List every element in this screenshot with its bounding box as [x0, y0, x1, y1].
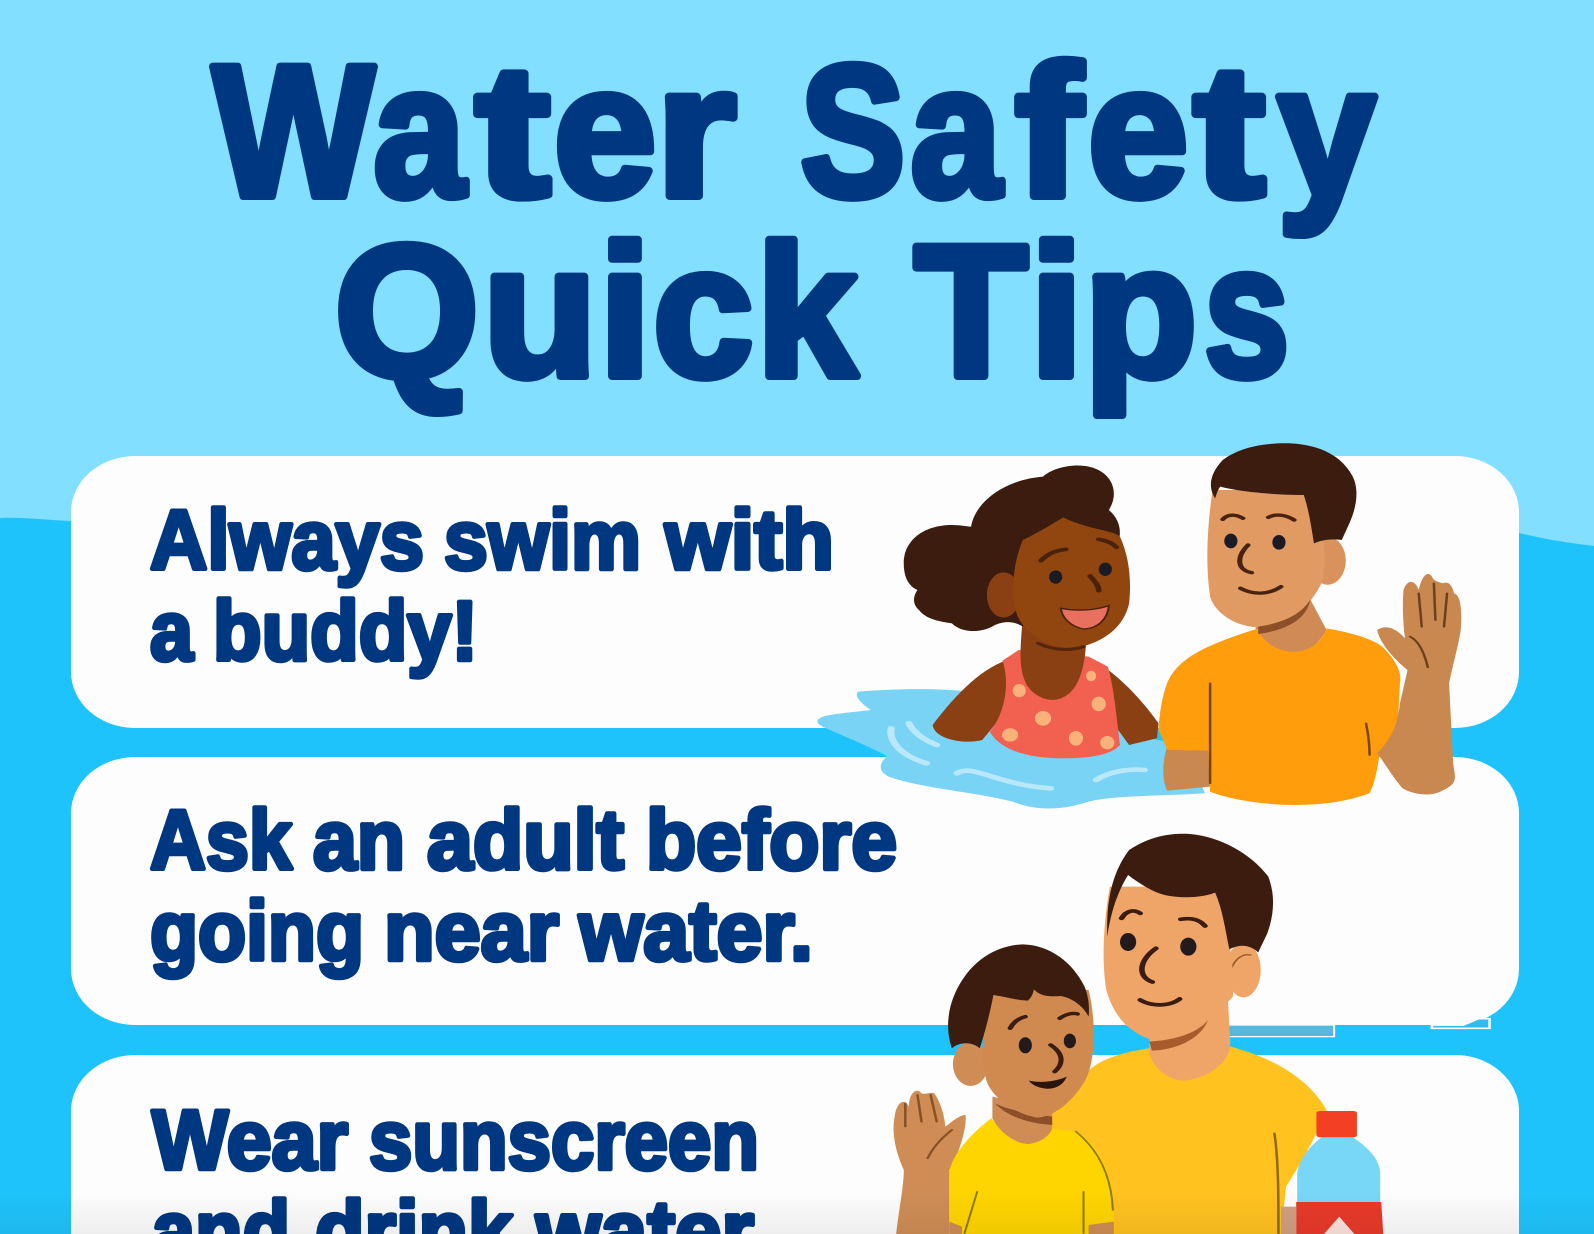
bottom shading — [0, 1190, 1594, 1234]
swimsuit — [990, 650, 1120, 758]
title line 2: T — [914, 206, 1028, 416]
adult eyes — [1120, 933, 1136, 951]
title line 2: u — [483, 206, 597, 416]
man lower arm — [1163, 747, 1210, 791]
tip 2 text: water. — [578, 884, 813, 978]
tip 2 text: adult — [427, 793, 624, 887]
boy — [894, 944, 1115, 1234]
title line 1: e — [1088, 26, 1188, 236]
girl hair back — [904, 465, 1120, 631]
tip 3 text: sunscreen — [369, 1093, 759, 1187]
man — [1158, 443, 1461, 805]
man hair — [1211, 443, 1356, 543]
title line 2: k — [756, 206, 858, 416]
tip 2 text — [150, 793, 897, 978]
boy neck — [992, 1097, 1052, 1144]
man eyes — [1224, 534, 1237, 548]
tip 2 text: going — [150, 884, 364, 978]
boy ear — [953, 1042, 988, 1086]
girl brows and nose — [1041, 539, 1116, 591]
bottle cap — [1316, 1111, 1357, 1137]
boy face — [983, 983, 1094, 1118]
girl arms — [933, 658, 1158, 745]
water bottle — [1281, 1111, 1383, 1234]
title line 1: e — [554, 26, 657, 236]
adult brows, nose and smile — [1122, 911, 1205, 1005]
tip 1 text: swim — [444, 493, 641, 587]
background: sky band with wave edge — [0, 0, 1594, 546]
title line 1: S — [800, 26, 905, 236]
title line 1: W — [212, 26, 375, 236]
girl face — [1013, 517, 1130, 648]
girl — [904, 465, 1158, 758]
title line 2: c — [653, 206, 754, 416]
title line 1: a — [910, 26, 1003, 236]
adult hand behind bottle — [1281, 1207, 1296, 1234]
title line 2: i — [599, 206, 651, 416]
tip 3 text: Wear — [152, 1093, 348, 1187]
image glitch: blue bar and corner — [1214, 1011, 1490, 1037]
tip 1 text: with — [664, 493, 834, 587]
tip 2 text: before — [646, 793, 897, 887]
title line 1: t — [475, 26, 550, 236]
title line 2: Q — [334, 206, 479, 416]
bottle body — [1297, 1137, 1380, 1202]
neck and chest — [1021, 617, 1086, 700]
title line 2: i — [1029, 206, 1084, 416]
tip 1 text — [150, 493, 834, 678]
adult — [1043, 834, 1327, 1234]
title line 1: a — [373, 26, 467, 236]
title line 2: p — [1084, 206, 1198, 416]
man waving hand and arm — [1377, 574, 1461, 794]
tip 1 text: Always — [150, 493, 424, 587]
adult jaw shadow — [1149, 1020, 1208, 1051]
title line 1: y — [1277, 26, 1376, 236]
swimsuit dots — [1002, 671, 1114, 749]
girl eyes — [1049, 570, 1062, 584]
man neck — [1256, 597, 1327, 658]
tip 1 text: buddy! — [213, 584, 478, 678]
title — [212, 26, 1376, 416]
title line 1: f — [1015, 26, 1083, 236]
man brows, nose and smile — [1223, 515, 1294, 593]
adult ear — [1226, 943, 1261, 997]
panel: tip 3 card — [71, 1055, 1519, 1234]
man face — [1207, 490, 1325, 627]
panel: tip 1 card — [71, 456, 1519, 728]
tip 2 text: an — [313, 793, 405, 887]
tip 3 text — [152, 1093, 759, 1234]
man jaw shadow — [1258, 599, 1310, 634]
panel: tip 2 card — [71, 757, 1519, 1025]
adult hair — [1107, 834, 1273, 952]
title line 1: r — [656, 26, 736, 236]
water splash — [817, 689, 1205, 809]
boy shirt — [949, 1118, 1115, 1234]
adult neck — [1149, 997, 1230, 1081]
illustration: girl and man swimming — [817, 443, 1461, 809]
boy brows and nose — [1010, 1013, 1077, 1072]
boy hair — [948, 944, 1089, 1048]
title line 1: t — [1193, 26, 1265, 236]
boy eyes — [1019, 1037, 1032, 1053]
tip 1 text: a — [150, 584, 194, 678]
adult face — [1104, 887, 1233, 1041]
tip 2 text: Ask — [150, 793, 293, 887]
man ear — [1309, 537, 1346, 585]
boy smile — [1029, 1077, 1067, 1089]
girl mouth — [1061, 606, 1109, 629]
illustration: man, boy and water bottle — [894, 834, 1490, 1234]
man shirt — [1158, 628, 1400, 805]
adult shirt — [1043, 1047, 1327, 1234]
bottle label — [1296, 1202, 1383, 1234]
boy raised hand and arm — [894, 1091, 966, 1234]
title line 2: s — [1204, 206, 1289, 416]
girl ear — [987, 572, 1020, 618]
tip 2 text: near — [384, 884, 559, 978]
